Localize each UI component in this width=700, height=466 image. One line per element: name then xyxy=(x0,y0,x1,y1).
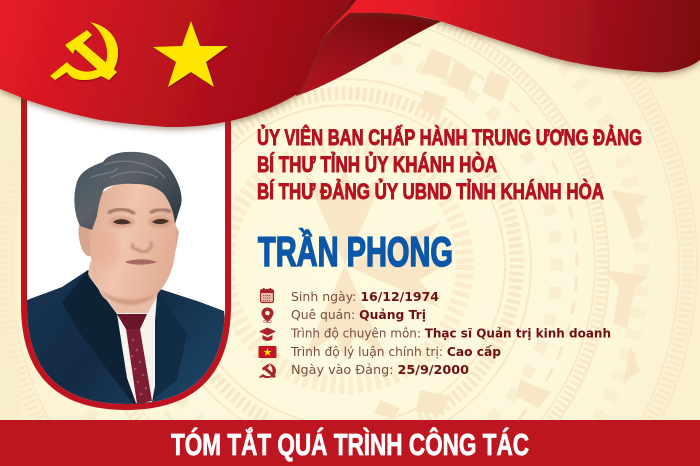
red banner xyxy=(0,0,352,127)
brows xyxy=(108,209,135,214)
info text lines: Quê quán: Quảng Trị xyxy=(291,308,426,322)
portrait frame xyxy=(21,90,231,420)
info text lines xyxy=(290,290,611,377)
name: TRẦN PHONG xyxy=(258,228,453,275)
icon: graduation cap xyxy=(259,328,276,341)
info text lines: Trình độ chuyên môn: Thạc sĩ Quản trị kinh doanh xyxy=(290,326,611,340)
info text lines: Trình độ lý luận chính trị: Cao cấp xyxy=(290,345,501,359)
icon: Vietnam flag xyxy=(258,346,276,358)
info text lines: Sinh ngày: 16/12/1974 xyxy=(291,290,439,304)
portrait photo: man in dark suit xyxy=(27,152,224,404)
bar title: TÓM TẮT QUÁ TRÌNH CÔNG TÁC xyxy=(171,426,529,462)
info text lines: Ngày vào Đảng: 25/9/2000 xyxy=(291,363,469,377)
dark ribbon fold xyxy=(296,0,442,96)
bottom bar xyxy=(0,420,700,466)
eyes xyxy=(113,219,131,224)
personal info list xyxy=(258,288,611,378)
face xyxy=(90,181,176,307)
neck and jaw xyxy=(88,262,158,313)
hair xyxy=(74,152,182,230)
suit xyxy=(27,270,224,404)
icon: small hammer and sickle xyxy=(259,363,276,378)
nose xyxy=(132,242,152,252)
icon: location pin xyxy=(262,308,274,323)
ears xyxy=(78,225,91,256)
heading: positions: BÍ THƯ TỈNH ỦY KHÁNH HÒA xyxy=(257,152,497,177)
icon: yellow star xyxy=(153,21,228,87)
eye shading xyxy=(109,216,135,228)
icon: calendar xyxy=(260,288,274,302)
mouth xyxy=(125,259,157,265)
heading: positions xyxy=(257,125,642,204)
heading: positions: BÍ THƯ ĐẢNG ỦY UBND TỈNH KHÁNH HÒA xyxy=(257,179,604,204)
shirt xyxy=(88,275,157,403)
top right ribbon xyxy=(323,0,700,72)
tie xyxy=(117,314,152,404)
icon: hammer and sickle xyxy=(50,22,118,80)
